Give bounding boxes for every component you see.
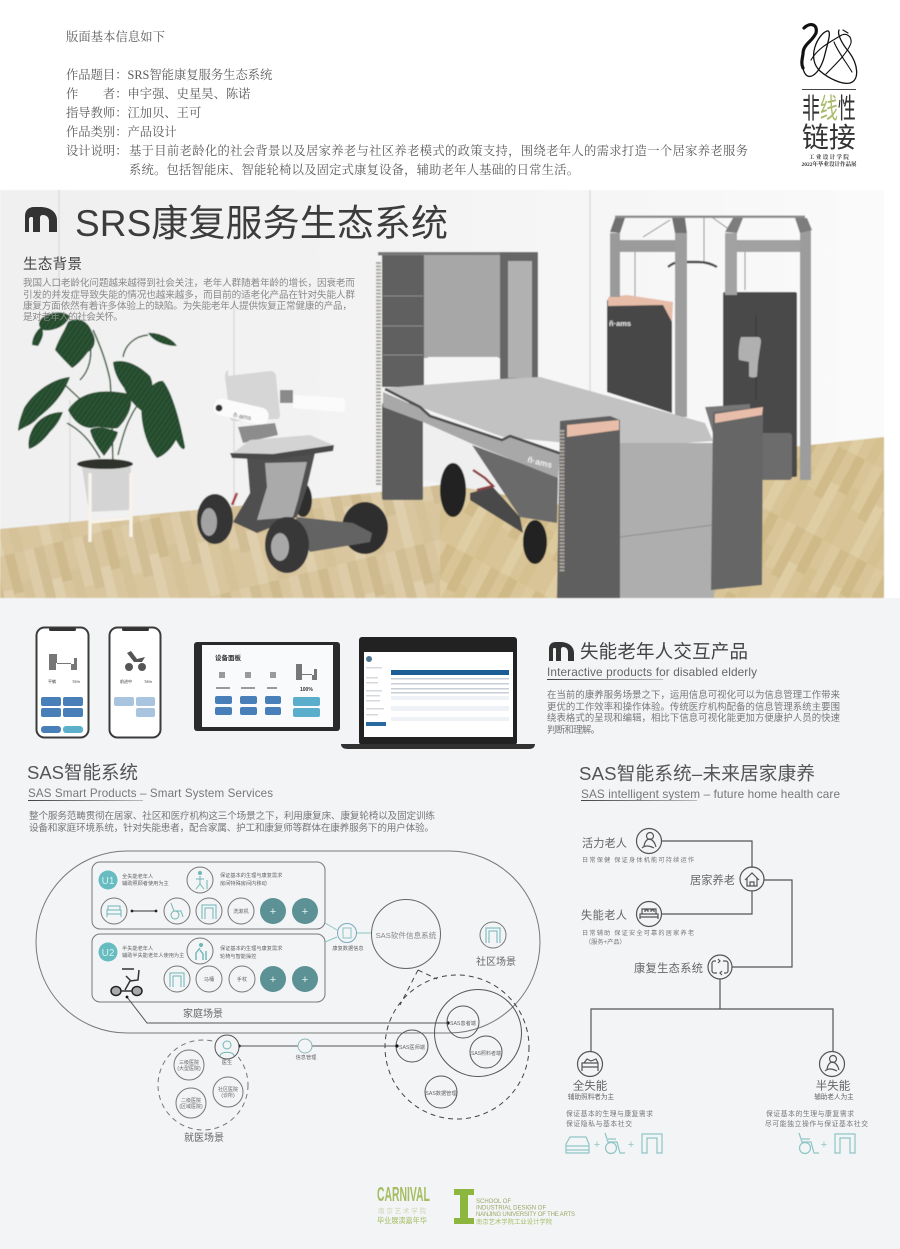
- information management label: 信息管理: [296, 1053, 317, 1061]
- disabled elderly icon: [636, 902, 662, 926]
- logo words link: 链接: [802, 121, 856, 153]
- bed perforated strip: [376, 262, 381, 485]
- wall seams: [59, 190, 590, 525]
- leaf top far left: [32, 328, 43, 346]
- bed under-space: [424, 420, 560, 505]
- community hospital: 社区医院: [218, 1086, 238, 1093]
- U2 cane circle: [229, 966, 255, 992]
- home care flow chart: [566, 828, 868, 1154]
- wheelchair front left wheel: [265, 517, 309, 573]
- smart wheelchair: [197, 370, 388, 573]
- logo caption 2: 2022年毕业设计作品展: [801, 160, 857, 168]
- phone 2: [110, 628, 160, 738]
- laptop base: [341, 744, 535, 749]
- authors row: 作 者：申宇强、史星昊、陈诺: [66, 86, 250, 101]
- phone 1 buttons: [41, 697, 83, 733]
- link from wheelchair to patient terminal: [126, 996, 450, 1025]
- wheelchair icon: [799, 1133, 819, 1154]
- carnival wordmark: CARNIVAL: [377, 1185, 430, 1206]
- frame left crossbar: [610, 240, 677, 252]
- bed foot right post: [711, 407, 763, 590]
- wheelchair left arm: [212, 397, 270, 426]
- active elderly label: 活力老人: [582, 837, 627, 850]
- bed undercarriage lower: [470, 487, 523, 533]
- body line 3: 绕表格式的呈现和编辑，相比下信息可视化能更加方便康护人员的快速: [547, 712, 840, 723]
- user group U1 box: [92, 862, 325, 929]
- brand icon: [25, 207, 57, 232]
- U1 description 2: 辅助照顾者使用为主: [122, 879, 169, 887]
- wheelchair seat edge: [230, 445, 334, 460]
- U2 wheelchair drawing: [111, 969, 142, 996]
- plus: +: [821, 1139, 827, 1151]
- school name line 1: SCHOOL OF: [476, 1199, 511, 1205]
- rehabilitation data node: [338, 924, 356, 942]
- section: SAS smart system: [27, 762, 435, 834]
- phone 1 notch: [49, 628, 76, 631]
- lower page background: [0, 598, 900, 1249]
- leaf top center: [55, 319, 95, 368]
- U2 description 2: 辅助半失能老年人使用为主: [122, 951, 184, 959]
- plant stand legs: [90, 473, 131, 542]
- frame center upright: [675, 233, 687, 417]
- tertiary hospital: [174, 1050, 204, 1080]
- training frame: [607, 216, 812, 480]
- U2 badge: [98, 942, 118, 962]
- information link: [237, 1044, 399, 1048]
- wall: [0, 190, 884, 540]
- U1 need 2: 房间特殊房间内移动: [220, 879, 267, 887]
- bed foot perforated strip: [560, 430, 564, 572]
- frame brand: ñ·ams: [609, 319, 631, 328]
- description line 2: 系统。包括智能床、智能轮椅以及固定式康复设备，辅助老年人基础的日常生活。: [129, 162, 579, 177]
- U1 frame circle: [196, 898, 222, 924]
- wheelchair body: [233, 453, 315, 533]
- U1 frame: [92, 862, 325, 929]
- frame top bar: [615, 216, 805, 218]
- wheelchair front hub: [271, 533, 289, 561]
- U2 need 2: 轮椅与智能操控: [220, 952, 256, 960]
- phone 2 percent: 78%: [144, 679, 152, 684]
- section: interactive products: [547, 641, 841, 735]
- U2 badge text: U2: [102, 948, 115, 959]
- subheading: SAS intelligent system – future home health care: [581, 787, 840, 801]
- bed foot left peach cap: [567, 420, 619, 437]
- connector to data node: [325, 923, 372, 942]
- wheelchair back rest: [225, 370, 280, 421]
- bed head left column: [382, 255, 424, 387]
- phone 1 body: [36, 628, 88, 738]
- school name line 2: INDUSTRIAL DESIGN OF: [476, 1206, 546, 1212]
- phone 2 body: [110, 628, 160, 738]
- U1 washer circle: 洗漱机: [233, 907, 250, 915]
- fully disabled subtitle: 辅助照料者为主: [568, 1092, 614, 1101]
- U1 add button 2: +: [302, 906, 308, 918]
- section subheading: Interactive products for disabled elderly: [547, 665, 757, 679]
- tablet screen: [202, 645, 333, 727]
- U2 frame circle: [164, 966, 190, 992]
- work title row: 作品题目：SRS智能康复服务生态系统: [66, 67, 273, 82]
- leaf lower center: [90, 427, 118, 456]
- bed icon: [566, 1137, 589, 1153]
- bed front wheel: [523, 520, 547, 564]
- SAS doctor terminal: SAS医师端: [399, 1043, 425, 1051]
- wheelchair icon: [605, 1133, 625, 1154]
- U2 add button 2: +: [302, 974, 308, 986]
- phone 1: [36, 628, 88, 738]
- wheelchair seat: [233, 435, 333, 454]
- U2 need 1: 保证基本的生理与康复需求: [220, 944, 283, 952]
- category row: 作品类别：产品设计: [66, 124, 177, 139]
- tablet body: [194, 642, 340, 731]
- wheelchair right arm connector: [280, 390, 293, 403]
- body line 2: 更优的工作效率和操作体验。传统医疗机构配备的信息管理系统主要围: [547, 701, 840, 712]
- tertiary hospital: 三级医院: [179, 1059, 199, 1066]
- tablet bed thumbnail: [296, 664, 317, 680]
- plus: +: [594, 1139, 600, 1151]
- background heading: 生态背景: [23, 256, 82, 273]
- rehab ecosystem label: 康复生态系统: [634, 961, 703, 975]
- frame left dark panel: [607, 300, 672, 413]
- frame right crossbar: [735, 240, 801, 252]
- U2 toilet circle: [196, 966, 222, 992]
- medical scene dashed boundary: [158, 1040, 248, 1130]
- rehabilitation data label: 康复数据信息: [332, 944, 364, 952]
- tablet status marks: [216, 672, 277, 689]
- secondary hospital: (区域医院): [179, 1103, 203, 1110]
- section heading: 失能老年人交互产品: [580, 641, 748, 662]
- U1 bed circle: [101, 898, 127, 924]
- wheelchair red strut: [232, 493, 237, 505]
- U2 frame: [92, 934, 325, 1002]
- active elderly icon: [636, 828, 662, 854]
- half disabled equipment icons: [799, 1133, 855, 1154]
- bed lower left leg: [382, 403, 423, 500]
- carnival subtitle: 毕业展演嘉年华: [377, 1216, 427, 1225]
- U2 add button 1: +: [270, 974, 276, 986]
- SAS data management: SAS数据管理: [425, 1089, 457, 1097]
- laptop screen: [364, 652, 513, 737]
- phone 2 wheelchair thumbnail: [125, 651, 146, 671]
- home scene capsule: [36, 851, 540, 1033]
- leaf top edge: [39, 312, 70, 330]
- frame left chamfers: [610, 218, 687, 233]
- half disabled icon: [820, 1052, 844, 1076]
- half disabled label: 半失能: [816, 1078, 851, 1092]
- fully disabled equipment icons: [566, 1133, 662, 1154]
- bed head top strip: [378, 252, 538, 256]
- U2 person icon: [187, 938, 213, 964]
- wheelchair front right wheel: [342, 502, 388, 554]
- bed rear wheel: [440, 463, 466, 517]
- rehab ecosystem icon: [708, 955, 732, 979]
- half disabled need 2: 尽可能独立操作与保证基本社交: [765, 1119, 868, 1128]
- body line 2: 设备和家庭环境系统，针对失能患者，配合家属、护工和康复师等群体在康养服务下的用户体验。: [29, 822, 434, 834]
- section underline: [547, 679, 663, 680]
- leaf far left: [18, 377, 70, 431]
- carnival logo: [377, 1185, 430, 1225]
- description row: 设计说明：: [66, 143, 128, 158]
- U2 description 1: 半失能老年人: [122, 944, 153, 952]
- bed side face: [383, 392, 560, 478]
- doctor node: [215, 1035, 239, 1059]
- logo scribble: [802, 25, 857, 83]
- wooden floor right: [440, 437, 884, 598]
- home care icon: [740, 867, 764, 891]
- half disabled subtitle: 辅助老人为主: [814, 1092, 854, 1101]
- hero photo: room scene: [0, 190, 884, 598]
- phone 1 bed thumbnail: [49, 654, 77, 670]
- home care label: 居家养老: [690, 873, 735, 887]
- training frame icon: [642, 1134, 662, 1153]
- subheading: SAS Smart Products – Smart System Services: [28, 787, 273, 800]
- carnival school name: 南京艺术学院: [378, 1206, 426, 1215]
- training frame icon: [835, 1134, 855, 1153]
- logo rule: [802, 89, 856, 90]
- frame right dark panel: [723, 292, 797, 477]
- school I mark: [454, 1189, 474, 1224]
- body line 1: 整个服务范畴贯彻在居家、社区和医疗机构这三个场景之下，利用康复床、康复轮椅以及固定训练: [29, 810, 435, 822]
- bed foot seam: [620, 525, 713, 537]
- secondary hospital: [176, 1088, 206, 1118]
- disabled elderly note 1: 日常辅助 保证安全可靠的居家养老: [582, 929, 694, 937]
- phone 1 stats: 平躺: [48, 678, 56, 684]
- footer logos: [377, 1185, 575, 1226]
- bed undercarriage: [472, 445, 558, 523]
- phone 2 buttons: [114, 697, 155, 717]
- exhibition logo: [801, 25, 857, 168]
- frame right upright b: [800, 230, 811, 480]
- community hospital: (诊所): [221, 1092, 235, 1099]
- underline: [28, 800, 143, 801]
- plant soil rim: [77, 459, 133, 469]
- wheelchair rear hub: [201, 508, 217, 536]
- U1 add button 1: +: [270, 906, 276, 918]
- heading: SAS智能系统–未来居家康养: [579, 763, 815, 784]
- user group U2 box: [92, 934, 325, 1002]
- home scene label: 家庭场景: [183, 1007, 223, 1020]
- body line 1: 我国人口老龄化问题越来越得到社会关注，老年人群随着年龄的增长，因衰老而: [23, 277, 355, 289]
- bed red linkage: [473, 470, 493, 490]
- description line 1: 基于目前老龄化的社会背景以及居家养老与社区养老模式的政策支持，围绕老年人的需求打造一个居家养老服务: [129, 143, 748, 158]
- frame peach pad: [608, 295, 673, 322]
- laptop sidebar avatar: [366, 656, 372, 662]
- laptop sidebar highlight: [366, 722, 386, 726]
- wooden floor left: [0, 485, 440, 598]
- secondary hospital: 二级医院: [181, 1097, 201, 1104]
- disabled elderly label: 失能老人: [581, 908, 627, 922]
- wheelchair rear left wheel: [197, 494, 233, 544]
- bed head white cushion: [428, 357, 498, 384]
- bed mattress: [385, 377, 713, 448]
- wheelchair light panel: [257, 462, 307, 520]
- U2 toilet circle: 马桶: [204, 975, 214, 983]
- bed foot left post: [557, 416, 620, 598]
- fully disabled icon: [578, 1052, 602, 1076]
- phone 1 percent: 75%: [72, 679, 80, 684]
- SAS data management: [425, 1076, 457, 1108]
- tertiary hospital: (大型医院): [177, 1065, 201, 1072]
- leaf center fan: [68, 391, 131, 428]
- wheelchair footplate: [293, 517, 372, 552]
- community frame icon: [480, 922, 506, 948]
- frame right upright a: [725, 233, 737, 295]
- U1 add button 1: [260, 898, 286, 924]
- U1 person icon: [187, 867, 213, 893]
- bed foot right inner post: [705, 404, 750, 440]
- medical scene label: 就医场景: [184, 1131, 224, 1144]
- instructors row: 指导教师：江加贝、王可: [66, 105, 201, 120]
- SAS doctor terminal: [396, 1030, 428, 1062]
- phone 2 stats: 前进中: [120, 678, 132, 684]
- tablet: [194, 642, 340, 731]
- SAS caregiver terminal: SAS照料者端: [471, 1050, 501, 1057]
- U2 cane circle: 手杖: [237, 975, 247, 983]
- wheelchair back support: [238, 423, 278, 443]
- disabled elderly note 2: （服务+产品）: [585, 938, 626, 946]
- plant: [18, 312, 185, 542]
- laptop: [341, 637, 535, 749]
- hero title: [23, 203, 448, 323]
- frame right lower gray: [760, 433, 792, 480]
- laptop lid: [359, 637, 517, 745]
- active elderly note: 日常保健 保证身体机能可持续运作: [582, 856, 694, 864]
- frame handle: [668, 262, 717, 267]
- community scene label: 社区场景: [476, 955, 516, 968]
- frame rear strings: [635, 216, 745, 298]
- bed brand: ñ·ams: [527, 454, 553, 470]
- body line 4: 是对老年人的社会关怀。: [23, 311, 123, 323]
- underline: [581, 800, 697, 801]
- fully disabled label: 全失能: [573, 1078, 608, 1092]
- leaf lower left: [28, 412, 63, 449]
- device mockups: [36, 628, 535, 749]
- logo words non-linear: 非线性: [802, 93, 856, 124]
- laptop table rows: [391, 678, 509, 721]
- section: future home health care: [579, 763, 840, 801]
- SAS software system circle: [372, 900, 440, 968]
- SAS patient terminal: SAS患者端: [450, 1019, 476, 1027]
- laptop table header: [391, 670, 509, 675]
- U1 add button 2: [292, 898, 318, 924]
- plant leaves: [18, 312, 185, 458]
- connector lines: [591, 841, 833, 1052]
- half disabled need 1: 保证基本的生理与康复需求: [766, 1109, 854, 1118]
- U1 wheelchair circle: [164, 898, 190, 924]
- logo caption 1: 工 业 设 计 学 院: [809, 153, 849, 161]
- wheelchair brand: ñ·ams: [233, 412, 252, 422]
- bed head seams: [383, 296, 423, 355]
- bed foot panel: [618, 443, 714, 598]
- background body text: [23, 277, 355, 323]
- leaf right fan: [141, 381, 185, 458]
- frame right chamfers: [725, 218, 812, 233]
- section brand icon: [549, 642, 574, 661]
- section body text: [547, 689, 841, 735]
- body line 1: 在当前的康养服务场景之下，运用信息可视化可以为信息管理工作带来: [547, 689, 841, 700]
- U1 description 1: 全失能老年人: [122, 872, 153, 880]
- information management node: [298, 1039, 312, 1053]
- bed head center panel: [424, 255, 500, 358]
- body line 2: 引发的并发症导致失能的情况也越来越多，而目前的适老化产品在针对失能人群: [23, 289, 355, 301]
- frame device rail: [755, 315, 757, 400]
- wheelchair rear right wheel: [294, 483, 312, 517]
- fully disabled need 2: 保证隐私与基本社交: [566, 1119, 632, 1128]
- frame wall device: [739, 337, 761, 378]
- SAS terminal group ring: [434, 990, 522, 1076]
- U2 add button 1: [260, 966, 286, 992]
- SAS platform dashed boundary: [385, 970, 529, 1119]
- wheelchair right arm: [293, 395, 345, 412]
- frame left upright: [610, 233, 620, 297]
- phone 2 notch: [122, 628, 149, 631]
- main title text: SRS康复服务生态系统: [75, 203, 448, 244]
- tablet value: 100%: [300, 687, 313, 693]
- bed foot right peach cap: [715, 407, 763, 423]
- U2 add button 2: [292, 966, 318, 992]
- header: basic information: [66, 29, 748, 177]
- U1 badge: [98, 870, 118, 890]
- plus: +: [628, 1139, 634, 1151]
- bed head right column: [500, 252, 538, 379]
- body line 3: 康复方面依然有着许多体验上的缺陷。为失能老年人提供恢复正常健康的产品，: [23, 300, 352, 312]
- plant stand pot: [82, 467, 131, 512]
- wheelchair arm joint: [216, 405, 222, 411]
- school logo: [454, 1189, 575, 1226]
- SAS patient terminal: [447, 1006, 479, 1038]
- header heading: 版面基本信息如下: [66, 29, 165, 44]
- U1 badge text: U1: [102, 876, 115, 887]
- service ecosystem diagram: [36, 851, 540, 1144]
- SAS software system circle: SAS软件信息系统: [376, 930, 437, 940]
- smart bed: [378, 252, 763, 598]
- community hospital: [213, 1077, 243, 1107]
- U1 washer circle: [228, 898, 254, 924]
- bed head light strip: [508, 261, 532, 378]
- tablet buttons: [215, 696, 320, 717]
- leaf top right: [148, 333, 177, 346]
- leaf upper right: [113, 361, 152, 412]
- plant stems: [63, 330, 150, 464]
- U1 need 1: 保证基本的生理与康复需求: [220, 871, 283, 879]
- school name line 3: NANJING UNIVERSITY OF THE ARTS: [476, 1212, 575, 1218]
- U1 link: [131, 910, 157, 912]
- SAS caregiver terminal: [470, 1036, 502, 1068]
- school name chinese: 南京艺术学院工业设计学院: [476, 1218, 552, 1226]
- laptop sidebar rows: [366, 667, 384, 716]
- fully disabled need 1: 保证基本的生理与康复需求: [566, 1109, 653, 1118]
- tablet title: 设备面板: [215, 653, 242, 662]
- doctor label: 医生: [222, 1058, 232, 1066]
- heading: SAS智能系统: [27, 762, 138, 783]
- body line 4: 判断和理解。: [547, 724, 600, 735]
- bed groove: [385, 389, 562, 454]
